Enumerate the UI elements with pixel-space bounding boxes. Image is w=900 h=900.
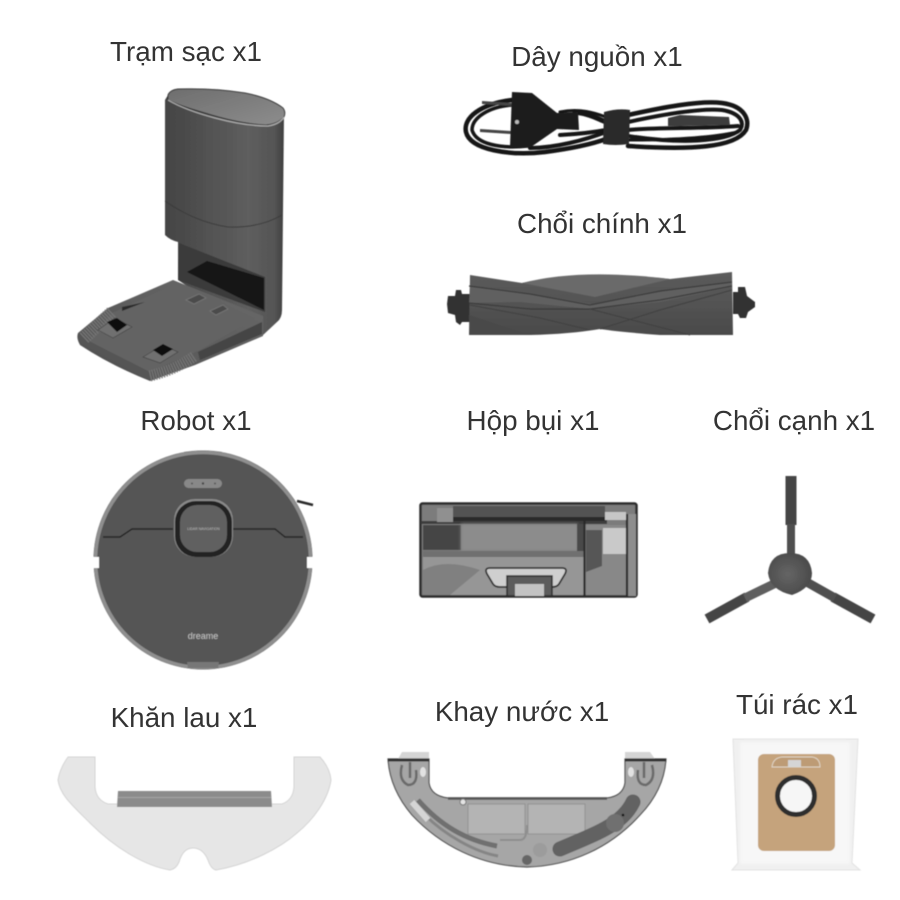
station contacts <box>186 294 228 315</box>
label: Robot: Robot x1 <box>140 405 252 436</box>
robot front bumper tab <box>187 662 219 668</box>
tank body <box>388 759 666 867</box>
bag flap <box>772 757 820 767</box>
tank tabs <box>398 752 655 759</box>
label: Túi rác: Túi rác x1 <box>736 689 858 720</box>
dust box handle <box>486 568 566 587</box>
station ribbed edges <box>84 312 112 338</box>
dust box clip <box>507 576 552 596</box>
station base plate <box>77 280 263 381</box>
brush left hub <box>447 290 470 325</box>
side brush hub <box>768 553 812 595</box>
mop cloth <box>58 757 331 870</box>
bag wrapper <box>732 739 860 870</box>
product: dust box <box>420 504 636 596</box>
robot side gaps <box>90 557 99 568</box>
robot side brush tip <box>297 501 313 505</box>
product: power cable <box>466 92 747 153</box>
label: Chổi cạnh: Chổi cạnh x1 <box>713 405 875 436</box>
product: robot vacuum <box>90 450 316 670</box>
bag ring <box>778 778 814 814</box>
product: water tank <box>388 752 666 867</box>
robot body <box>94 450 312 670</box>
plug body <box>510 92 579 147</box>
cable loops <box>466 100 747 153</box>
label: Chổi chính: Chổi chính x1 <box>517 208 687 239</box>
dust box right panel <box>585 525 627 595</box>
label: Trạm sạc: Trạm sạc x1 <box>110 36 262 67</box>
dust box top strip <box>453 506 605 519</box>
tank reservoir right <box>560 802 633 849</box>
product: robot vacuum: LIDAR NAVIGATION <box>187 527 220 531</box>
product: charging station <box>77 89 285 381</box>
product: dust bag <box>732 739 860 870</box>
product: main brush <box>447 272 755 335</box>
station tower <box>165 95 284 336</box>
tank clips <box>401 762 653 785</box>
label: Khăn lau: Khăn lau x1 <box>111 702 257 733</box>
robot button panel <box>184 479 222 488</box>
mop backing strip <box>117 791 272 807</box>
station lid <box>168 89 285 125</box>
tank windows <box>468 804 525 834</box>
robot brand: dreame <box>188 631 218 641</box>
station foot pads <box>98 318 178 363</box>
plug pins <box>480 101 513 134</box>
station recess <box>178 243 265 312</box>
robot body seam <box>103 529 303 537</box>
side brush arms <box>786 476 796 525</box>
dust box chamber <box>423 525 461 550</box>
brush right hub <box>733 287 755 318</box>
tank tube left <box>418 800 497 846</box>
label: Dây nguồn: Dây nguồn x1 <box>511 41 683 72</box>
brush body <box>469 272 733 335</box>
robot lidar <box>174 499 233 557</box>
cable connector <box>668 115 730 126</box>
tank round details <box>533 843 547 857</box>
bag kraft card <box>758 754 835 851</box>
label: Khay nước: Khay nước x1 <box>435 696 609 727</box>
label: Hộp bụi: Hộp bụi x1 <box>467 405 599 436</box>
product: mop pad <box>58 757 331 870</box>
cable strap <box>603 109 630 145</box>
product: side brush <box>707 476 873 619</box>
dust box shell <box>420 504 636 596</box>
